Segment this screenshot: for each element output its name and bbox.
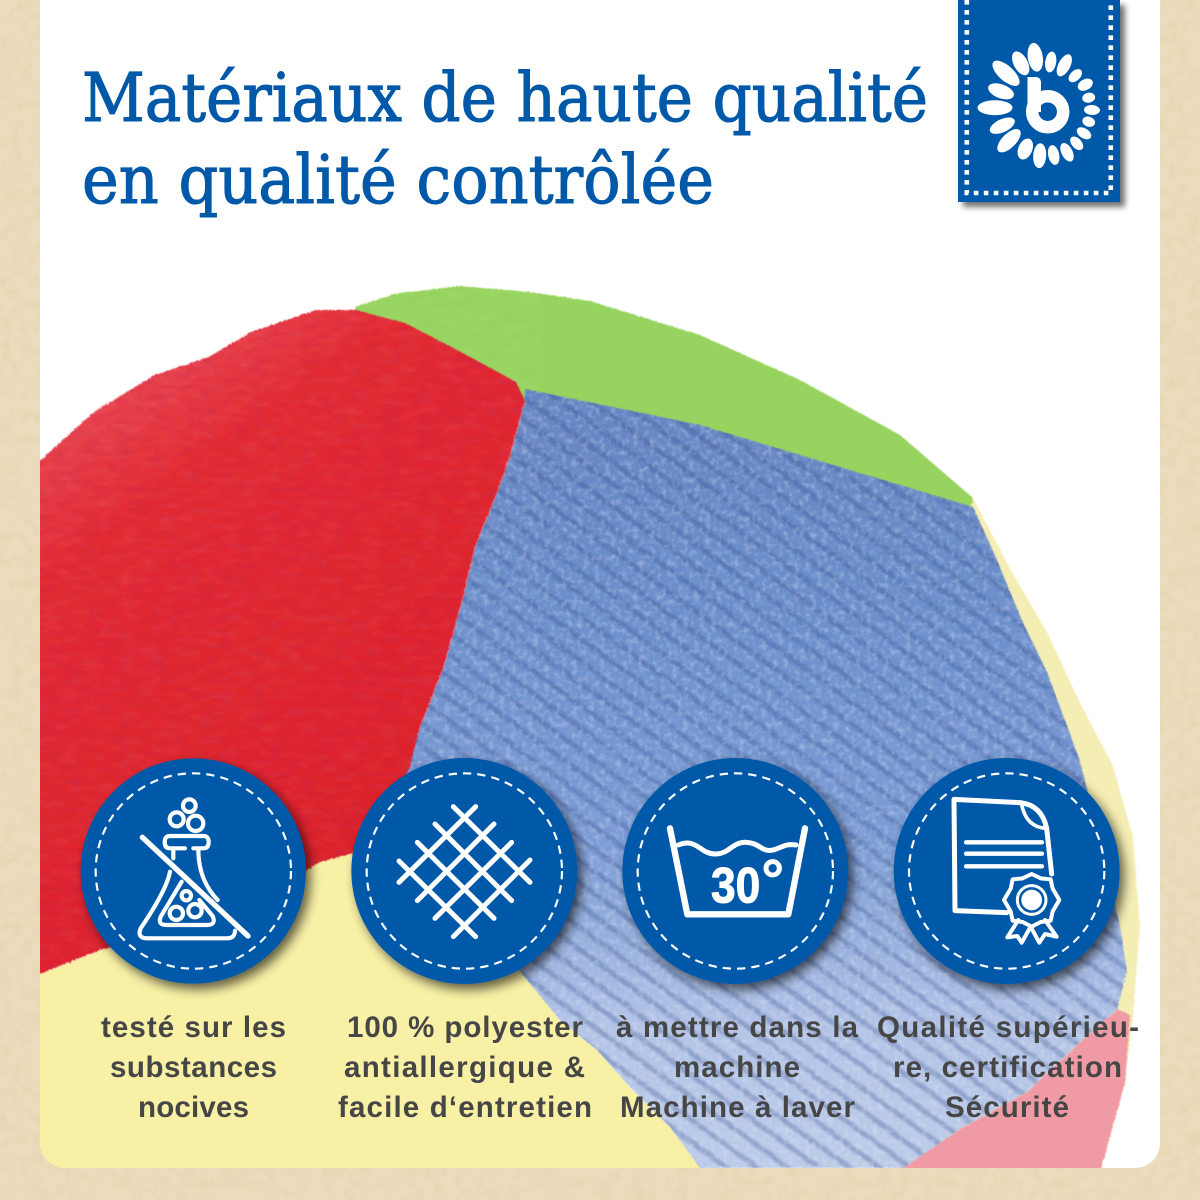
caption: machine wash: à mettre dans la <box>616 1011 859 1044</box>
caption: tested for harmful substances: substances <box>110 1051 277 1084</box>
caption: machine wash: Machine à laver <box>620 1091 856 1124</box>
badge: polyester mesh <box>351 758 577 984</box>
caption: polyester: 100 % polyester <box>347 1011 584 1044</box>
icon: wash tub: 30 <box>711 858 760 914</box>
icon: letter b <box>1028 77 1063 127</box>
ball: red panel <box>30 300 540 990</box>
title <box>82 59 928 219</box>
badge: certified quality <box>894 758 1120 984</box>
caption: polyester: antiallergique & <box>344 1051 585 1084</box>
caption: machine wash <box>616 1011 859 1124</box>
caption: superior quality <box>877 1011 1139 1124</box>
ball: fabric texture <box>40 310 530 950</box>
caption: tested for harmful substances <box>101 1011 286 1124</box>
caption: tested for harmful substances: nocives <box>138 1091 249 1124</box>
badge: machine wash 30 degrees <box>622 758 848 984</box>
caption: machine wash: machine <box>674 1051 800 1084</box>
blue knit texture <box>400 380 1140 1168</box>
ball: blue knit panel <box>400 380 1140 1168</box>
ball: right yellow panel <box>942 498 1141 1168</box>
caption: polyester <box>338 1011 592 1124</box>
caption: tested for harmful substances: testé sur les <box>101 1011 286 1044</box>
ball: green panel <box>355 286 973 520</box>
caption: superior quality: Sécurité <box>945 1091 1069 1124</box>
ball: yellow bottom panel <box>30 845 705 1172</box>
caption: superior quality: Qualité supérieu- <box>877 1011 1139 1044</box>
plush ball photo <box>30 286 1140 1172</box>
red plush texture <box>30 300 540 990</box>
ball: pink panel <box>895 1009 1130 1172</box>
icon: mesh <box>399 807 530 937</box>
icon: wash tub: ° <box>761 849 784 912</box>
icon: crossed-out flask <box>140 799 248 938</box>
caption: polyester: facile d‘entretien <box>338 1091 592 1124</box>
caption: superior quality: re, certification <box>893 1051 1122 1084</box>
badge: tested for harmful substances <box>81 758 306 984</box>
icon: flower petals <box>978 42 1100 169</box>
icon: certificate <box>954 799 1059 943</box>
stitched border <box>967 0 1111 193</box>
icon: wash tub <box>670 828 805 914</box>
brand tag logo <box>958 0 1120 202</box>
title: Matériaux de haute qualité <box>82 59 928 137</box>
title: en qualité contrôlée <box>82 141 714 219</box>
